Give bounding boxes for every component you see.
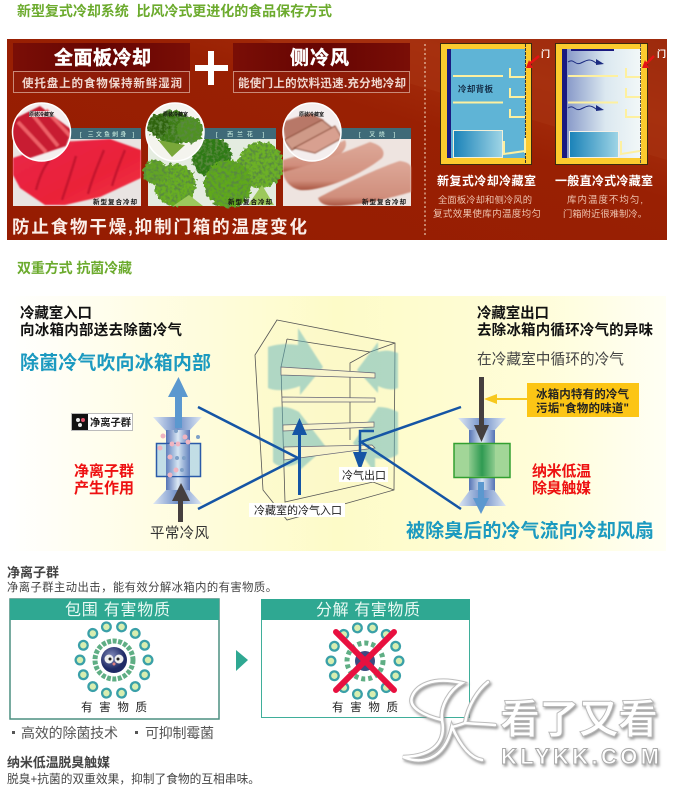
fridge diagram: new composite: 门 [541,48,550,59]
heading bar: side cold air: 能使门上的饮料迅速.充分地冷却 [238,76,406,90]
callout: fridge odour: 冰箱内特有的冷气 [536,387,630,401]
food photo: broccoli: 原装冷藏室 [163,111,188,118]
fridge diagram: ordinary direct cool [556,44,666,164]
caption: prevent drying: 防止食物干燥,抑制门箱的温度变化 [12,217,307,237]
fridge wireframe [255,320,398,520]
heading: dual antibacterial: 双重方式 抗菌冷藏 [17,260,132,276]
food photo: barbecued pork: 新型复合冷却 [362,197,406,206]
arrow: to decompose [236,650,248,671]
arrow: dirty air down [474,377,489,442]
panel: decompose harmful substance: 分解 有害物质 [316,601,420,619]
text block: ion cluster [7,565,277,594]
watermark: KLYKK: 看了又看 [500,698,658,742]
label: harmful substance: 有 害 物 质 [81,700,147,714]
caption: ordinary fridge: 门箱附近很难制冷。 [563,208,647,219]
arrow: deodorised air down [473,482,489,514]
caption: ordinary fridge: 库内温度不均匀, [567,194,643,206]
text block: ion cluster: 净离子群 [7,565,59,580]
food photo: barbecued pork [282,103,411,206]
logo: plasmacluster: 净离子群 [90,416,131,429]
text: nano catalyst: 除臭触媒 [532,479,591,497]
text: fridge entrance [20,304,182,339]
callout: fridge odour: 污垢"食物的味道" [536,401,629,415]
food photo: salmon sashimi: 新型复合冷却 [93,197,138,206]
callout: fridge odour [484,383,639,417]
fridge diagram: ordinary direct cool: 门 [657,48,666,59]
text block: nano catalyst: 纳米低温脱臭触媒 [7,755,110,770]
heading bar: side cold air [233,43,410,92]
text: fridge exit: 冷藏室出口 [477,304,549,322]
label: cooling back panel: 冷却背板 [458,84,493,94]
food photo: broccoli: [ 西兰花 ] [216,130,264,138]
watermark: KLYKK: KLYKK.COM [501,744,659,769]
callout lines: left [198,407,298,509]
food photo: salmon sashimi: [ 三文鱼刺身 ] [80,130,134,138]
panel: decompose harmful substance [261,599,470,718]
list: benefits [12,725,214,741]
caption: new fridge: 复式效果使库内温度均匀 [433,208,541,220]
text: nano catalyst [532,462,591,497]
label: harmful substance: 有 害 物 质 [332,700,398,714]
panel: dual antibacterial diagram [7,296,666,551]
fridge diagram: new composite [440,44,550,164]
panel: surround harmful substance: 包围 有害物质 [65,601,170,619]
caption: new fridge [433,173,541,220]
panel: surround harmful substance [10,599,219,719]
heading: composite cooling: 新型复式冷却系统 比风冷式更进化的食品保存方式 [17,3,332,19]
label: cold air inlet: 冷藏室的冷气入口 [254,503,342,517]
text: fridge exit [477,304,654,339]
arrow: entrance up [292,418,307,495]
list: benefits: 高效的除菌技术 [21,725,118,741]
arrow: door [645,56,654,65]
text: ion effect: 净离子群 [74,462,134,480]
food photo: salmon sashimi [10,103,141,206]
caption: ordinary fridge [555,173,653,219]
arrow: door [528,56,539,65]
device: nano catalyst [454,418,510,506]
label: normal cold air: 平常冷风 [150,525,210,542]
heading bar: full panel cooling [13,43,190,92]
heading bar: full panel cooling: 使托盘上的食物保持新鲜湿润 [22,76,182,90]
text block: nano catalyst: 脱臭+抗菌的双重效果，抑制了食物的互相串味。 [7,772,260,786]
icon: germ surrounded by ions [74,620,154,700]
icon: germ destroyed [326,621,404,701]
caption: ordinary fridge: 一般直冷式冷藏室 [555,173,653,188]
arrows: uneven air flow [568,59,604,111]
food photo: broccoli [143,103,284,208]
logo: plasmacluster [72,414,132,430]
food photo: broccoli: 新型复合冷却 [228,197,272,206]
text: fridge entrance: 冷藏室入口 [20,304,92,322]
text: antibacterial air blown: 除菌冷气吹向冰箱内部 [20,351,211,374]
text: fridge entrance: 向冰箱内部送去除菌冷气 [20,321,182,339]
divider: dotted [424,44,426,236]
arrow: clean air up [168,377,188,428]
food photo: barbecued pork: 原装冷藏室 [299,111,324,118]
heading bar: side cold air: 侧冷风 [290,47,349,69]
text: ion effect [74,462,134,497]
text: deodorised air flow: 被除臭后的冷气流向冷却风扇 [406,519,654,542]
text: ion effect: 产生作用 [74,480,134,497]
heading bar: full panel cooling: 全面板冷却 [54,46,151,69]
label: cold air outlet: 冷气出口 [342,468,386,482]
food photo: barbecued pork: [ 叉烧 ] [359,130,395,138]
text: nano catalyst: 纳米低温 [532,462,591,480]
device: ion generator [153,417,202,504]
caption: new fridge: 新复式冷却冷藏室 [437,173,536,188]
panel: composite cooling banner [7,39,667,240]
arrows: air circulation [268,328,398,473]
text: fridge exit: 去除冰箱内循环冷气的异味 [477,321,654,339]
food photo: salmon sashimi: 原装冷藏室 [29,111,54,118]
arrow: normal air in [172,483,190,522]
text block: nano catalyst [7,755,260,786]
text: circulating air: 在冷藏室中循环的冷气 [477,351,624,368]
icon: plus [195,51,228,85]
watermark: KLYKK [403,681,659,769]
text block: ion cluster: 净离子群主动出击，能有效分解冰箱内的有害物质。 [7,580,277,594]
caption: new fridge: 全面板冷却和侧冷风的 [438,194,532,205]
callout lines: right [361,407,461,509]
list: benefits: 可抑制霉菌 [145,725,214,741]
arrow: exit down [360,431,374,468]
